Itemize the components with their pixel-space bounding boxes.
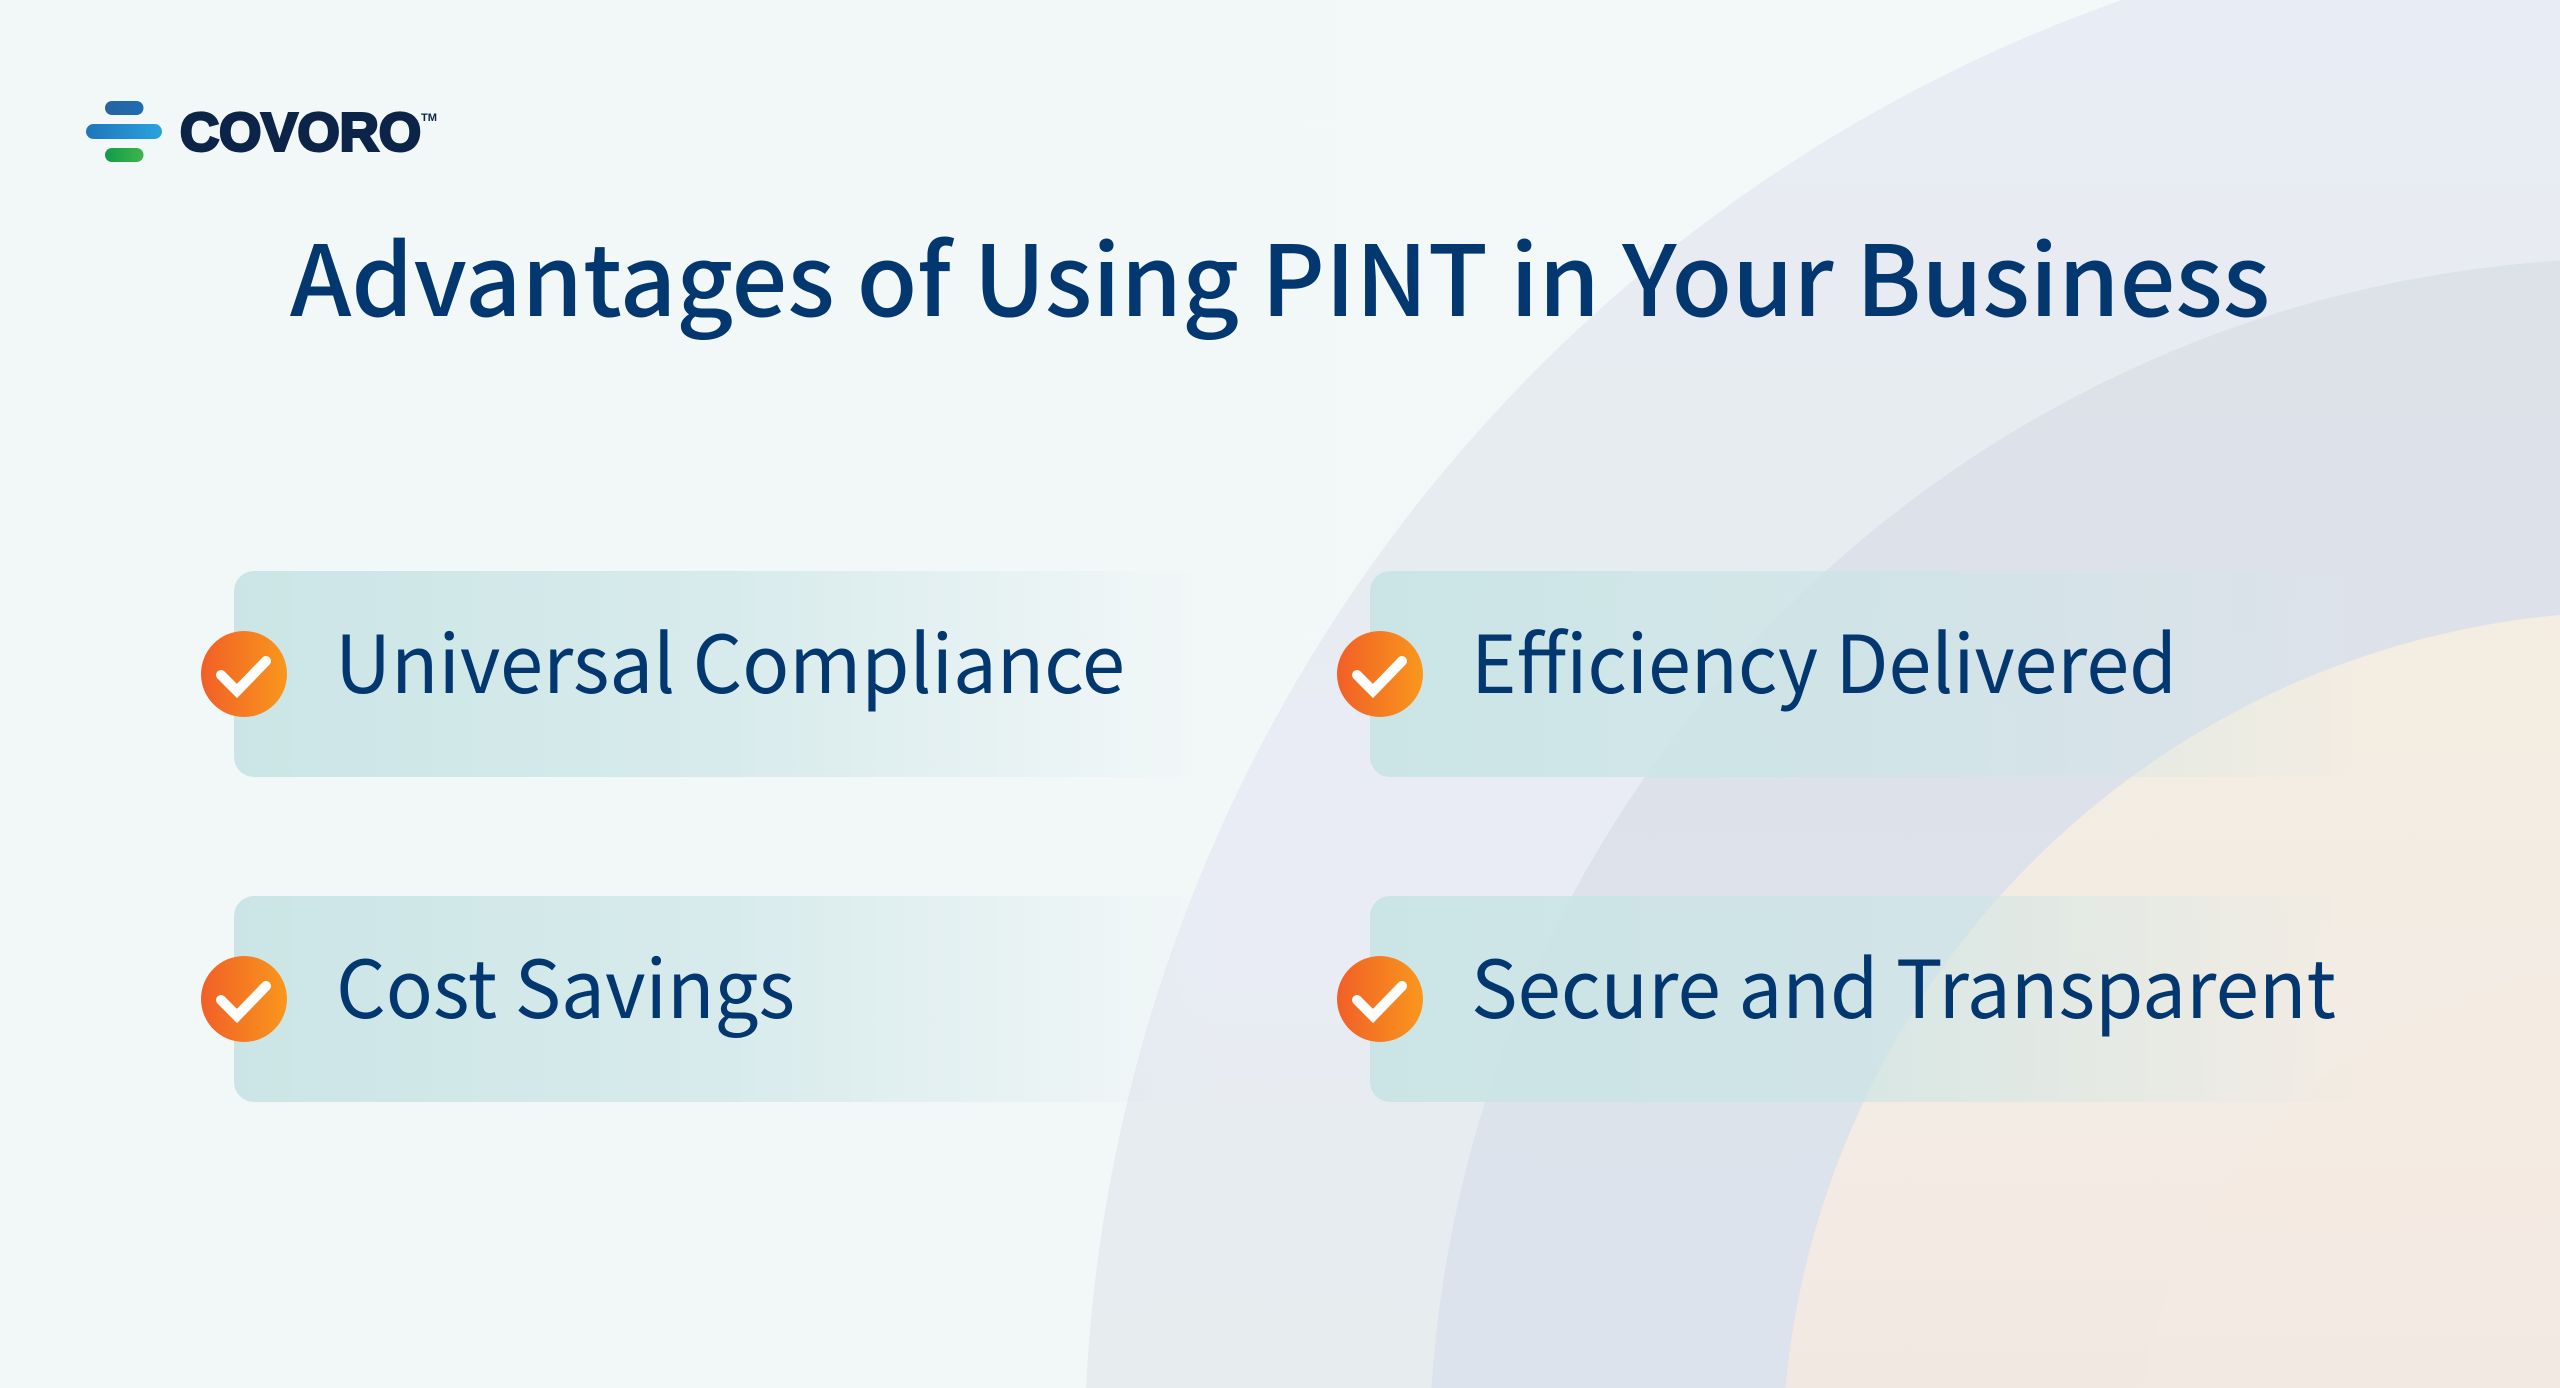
panel: Efficiency Delivered <box>1337 571 2360 777</box>
card background <box>234 571 1214 777</box>
icon: check badge <box>1337 631 1423 717</box>
panel: Cost Savings <box>201 896 1214 1102</box>
panel: Secure and Transparent <box>1337 896 2360 1102</box>
panel: Universal Compliance <box>201 571 1214 777</box>
label: Efficiency Delivered <box>1471 601 2177 717</box>
logo trademark: TM <box>421 112 437 124</box>
label: Universal Compliance <box>335 601 1125 717</box>
icon: logo bars <box>86 101 162 162</box>
card background <box>1370 896 2360 1102</box>
label: Secure and Transparent <box>1471 926 2336 1042</box>
logo: Covoro <box>86 101 437 162</box>
logo wordmark: COVORO <box>180 102 421 162</box>
card background <box>234 896 1214 1102</box>
icon: check badge <box>201 956 287 1042</box>
concentric background arcs <box>1086 0 2560 1388</box>
card background <box>1370 571 2360 777</box>
label: Cost Savings <box>336 926 795 1042</box>
icon: check badge <box>201 631 287 717</box>
icon: check badge <box>1337 956 1423 1042</box>
title: Advantages of Using PINT in Your Business <box>290 203 2270 345</box>
